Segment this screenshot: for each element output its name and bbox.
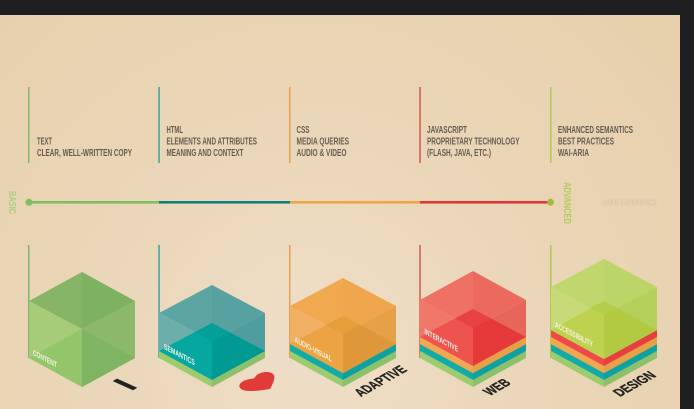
cube: audio-visual — [289, 245, 396, 387]
column: javascript: (FLASH, JAVA, ETC.) — [427, 148, 491, 159]
cube: accessibility: ACCESSIBILITY — [555, 320, 593, 349]
title word: design: DESIGN — [610, 369, 660, 399]
column: css: AUDIO & VIDEO — [296, 148, 347, 159]
column: javascript: PROPRIETARY TECHNOLOGY — [427, 137, 520, 148]
cube: semantics: SEMANTICS — [164, 342, 195, 368]
label: advanced: ADVANCED — [561, 182, 572, 224]
column: html: HTML — [166, 125, 183, 136]
column: javascript: JAVASCRIPT — [427, 125, 467, 136]
column: html — [158, 87, 257, 163]
column: css: MEDIA QUERIES — [296, 137, 349, 148]
cube: semantics — [158, 245, 265, 387]
cube: content — [28, 245, 135, 387]
cube: interactive: INTERACTIVE — [424, 327, 458, 354]
label: user experience: USER EXPERIENCE — [603, 198, 657, 208]
column: css: CSS — [296, 125, 310, 136]
column: enhanced semantics: ENHANCED SEMANTICS — [558, 125, 633, 136]
column: text: TEXT — [37, 137, 52, 148]
title word: adaptive: ADAPTIVE — [351, 364, 411, 399]
column: javascript — [419, 87, 520, 163]
column: enhanced semantics — [550, 87, 633, 163]
title word: I: I — [105, 375, 145, 394]
column: enhanced semantics: WAI-ARIA — [558, 148, 589, 159]
column: text — [28, 87, 132, 163]
label: basic: BASIC — [6, 191, 17, 214]
column: text: CLEAR, WELL-WRITTEN COPY — [37, 148, 132, 159]
cube: interactive — [419, 245, 526, 387]
timeline — [26, 199, 554, 206]
cube: audio-visual: AUDIO-VISUAL — [294, 335, 332, 364]
column: enhanced semantics: BEST PRACTICES — [558, 137, 614, 148]
cube: accessibility — [550, 245, 657, 387]
column: html: ELEMENTS AND ATTRIBUTES — [166, 137, 257, 148]
icon: heart — [239, 372, 274, 391]
column: html: MEANING AND CONTEXT — [166, 148, 244, 159]
column: css — [289, 87, 349, 163]
cube: content: CONTENT — [33, 348, 57, 370]
title word: web: WEB — [480, 377, 515, 398]
